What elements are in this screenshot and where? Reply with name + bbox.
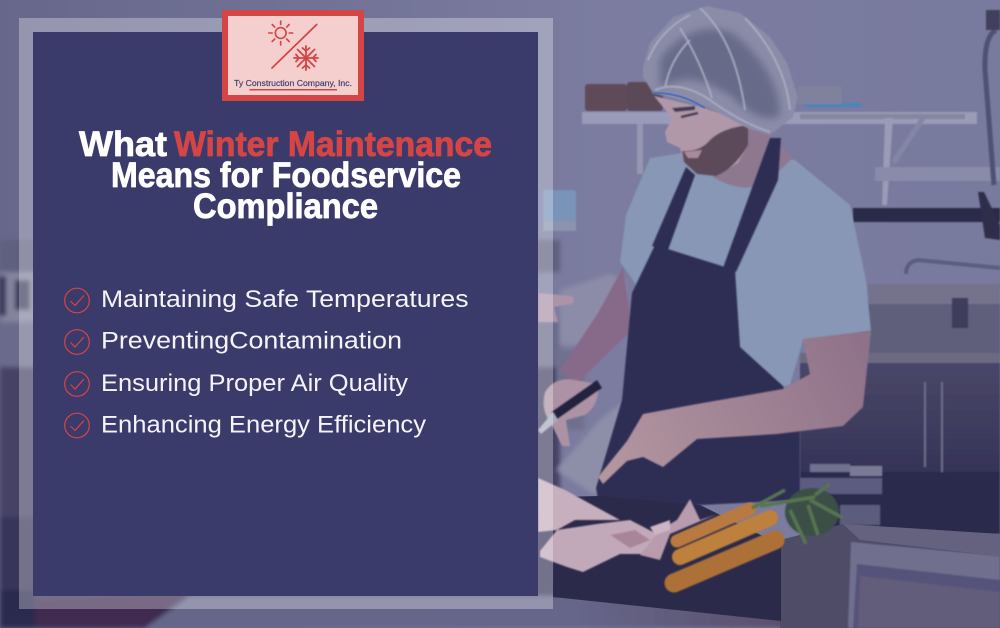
checklist [65, 286, 468, 438]
title [79, 125, 492, 226]
raw chicken [538, 478, 717, 572]
logo icon: sun [269, 21, 293, 45]
wire shelf [582, 82, 1000, 205]
logo icon: snowflake [294, 46, 318, 70]
logo underline [250, 89, 337, 91]
carrot greens [752, 484, 843, 544]
title: What [79, 125, 167, 164]
translucent panel frame [19, 18, 553, 609]
carrots [674, 509, 775, 583]
sink and cabinets right [800, 284, 1000, 534]
baking tray [848, 542, 1000, 628]
title: Compliance [193, 187, 378, 226]
item: energy efficiency: Enhancing Energy Efficiency [101, 412, 426, 438]
item: safe temperatures: Maintaining Safe Temperatures [101, 286, 468, 313]
cook's right arm pointing [598, 331, 871, 484]
title: Winter Maintenance [174, 125, 492, 164]
counter top right [780, 524, 1000, 628]
logo [225, 13, 361, 98]
cook's face [654, 96, 748, 176]
cutting board [553, 496, 781, 621]
soap dispenser [543, 190, 576, 231]
item: contamination: PreventingContamination [101, 328, 402, 354]
item: air quality: Ensuring Proper Air Quality [101, 370, 408, 397]
logo icon: slash [272, 24, 317, 68]
cook's T-shirt [620, 150, 871, 390]
apron [596, 138, 800, 510]
left kitchen background [0, 240, 1000, 628]
hair net [643, 6, 798, 135]
cook's left arm and knife hand [538, 267, 632, 446]
white bins behind hands [556, 274, 628, 495]
logo wordmark: Ty Construction Company, Inc. [234, 78, 352, 88]
black pipe [853, 192, 1000, 240]
sprayer and faucet [906, 10, 1000, 328]
title: Means for Foodservice [111, 156, 461, 195]
navy panel [33, 32, 538, 596]
cook's neck [713, 125, 793, 188]
